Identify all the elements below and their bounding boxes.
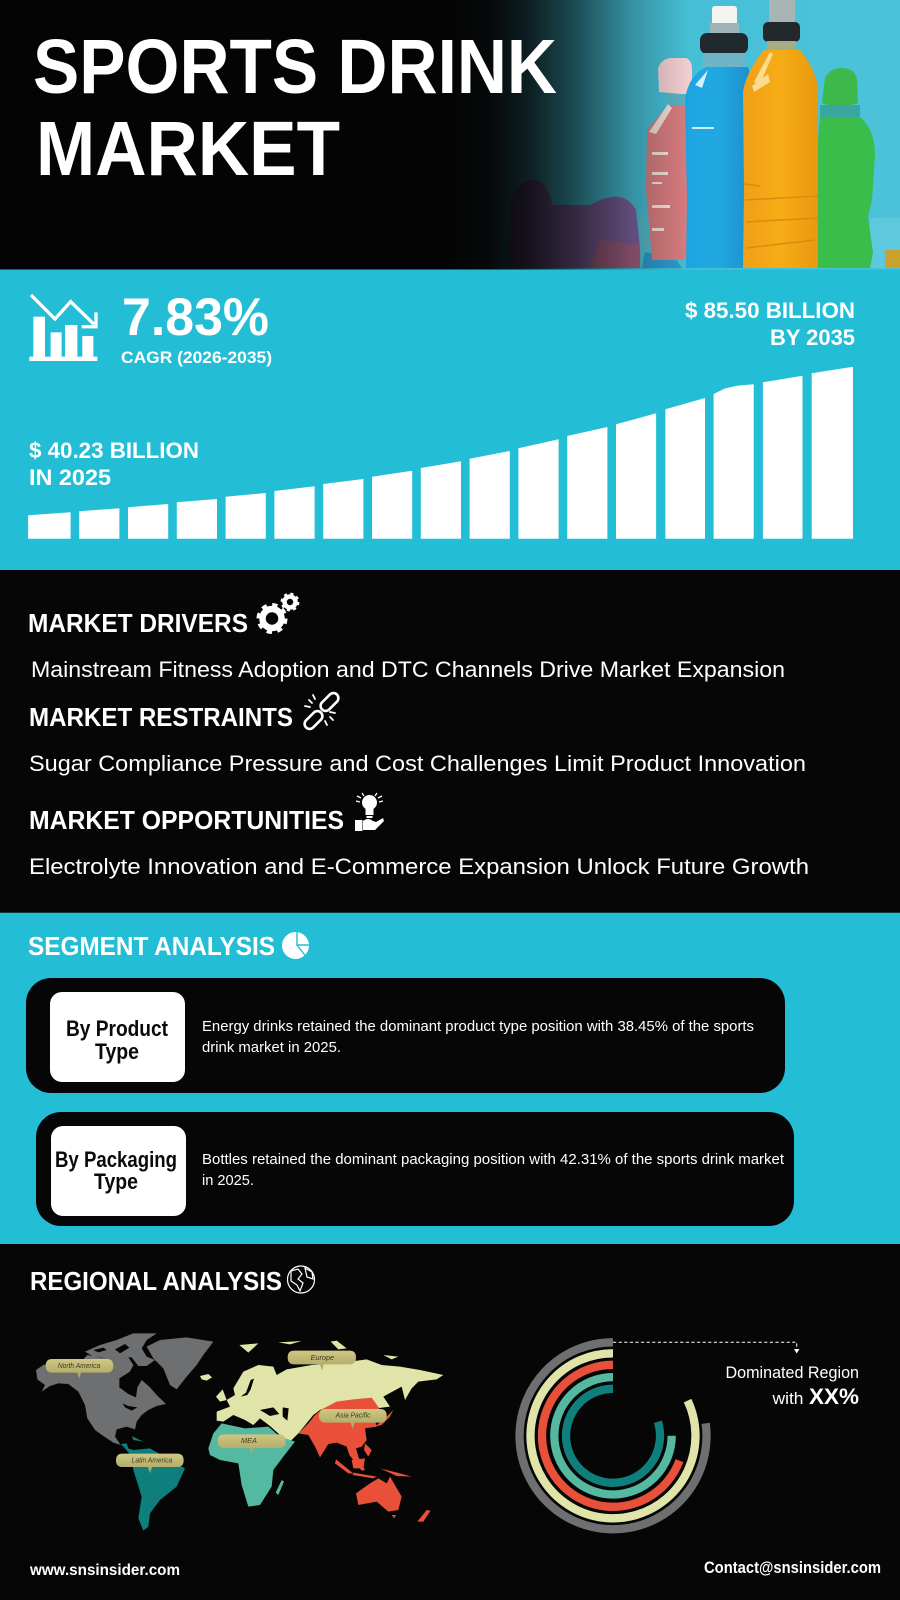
panel: market dynamics	[0, 570, 900, 913]
callout: dominated region: with	[771, 1390, 804, 1408]
region: Asia Pacific	[298, 1398, 431, 1522]
heading: segment analysis: SEGMENT ANALYSIS	[28, 931, 275, 961]
icon: gears	[258, 594, 298, 632]
green bottle	[816, 68, 875, 268]
bar chart: growth	[28, 367, 853, 539]
icon: bar chart with falling line	[29, 295, 97, 361]
callout: dominated region: XX%	[809, 1384, 859, 1409]
callout: North America: North America	[58, 1361, 100, 1370]
icon: broken chain	[303, 691, 340, 731]
heading: market drivers: MARKET DRIVERS	[28, 608, 248, 638]
description: by product type: Energy drinks retained the dominant product type position with 38.45% of the sports	[202, 1019, 754, 1035]
label box: by packaging type: Type	[94, 1169, 138, 1194]
CAGR value: 7.83%	[122, 288, 269, 347]
text: drivers: Mainstream Fitness Adoption and DTC Channels Drive Market Expansion	[31, 657, 785, 682]
callout: Latin America	[116, 1454, 184, 1473]
title	[33, 24, 557, 192]
start value: $ 40.23 BILLION	[29, 438, 199, 463]
icon: globe	[288, 1266, 314, 1293]
callout: MEA	[218, 1434, 286, 1454]
region: Europe	[200, 1341, 443, 1442]
end value: $ 85.50 BILLION	[685, 298, 855, 323]
description: by packaging type	[202, 1152, 784, 1189]
text: restraints: Sugar Compliance Pressure and Cost Challenges Limit Product Innovation	[29, 751, 806, 776]
world map	[36, 1333, 443, 1531]
callout: dominated region: Dominated Region	[726, 1364, 859, 1382]
photo: drink bottles	[508, 0, 900, 268]
description: by product type	[202, 1019, 754, 1056]
icon: pie chart	[282, 930, 312, 959]
end value	[685, 298, 855, 350]
callout: Latin America: Latin America	[132, 1456, 172, 1465]
title: SPORTS DRINK	[33, 24, 557, 110]
radial bar chart	[520, 1342, 707, 1529]
label box: by product type: Type	[95, 1039, 139, 1064]
end value: BY 2035	[770, 325, 855, 350]
region: Middle East and Africa	[208, 1423, 295, 1507]
heading: market opportunities: MARKET OPPORTUNITIES	[29, 805, 344, 835]
callout: Europe	[288, 1351, 356, 1371]
callout: North America	[46, 1359, 113, 1379]
start value	[29, 438, 199, 490]
start value: IN 2025	[29, 465, 111, 490]
text: opportunities: Electrolyte Innovation and E-Commerce Expansion Unlock Future Growth	[29, 854, 809, 879]
dashed arrow	[613, 1342, 800, 1354]
callout: dominated region	[726, 1364, 859, 1409]
panel: market size	[0, 270, 900, 570]
footer: website: www.snsinsider.com	[29, 1562, 180, 1579]
label box: by product type: By Product	[66, 1016, 169, 1041]
description: by packaging type: in 2025.	[202, 1173, 254, 1189]
callout: Asia Pacific	[319, 1409, 387, 1429]
card: by packaging type	[36, 1112, 794, 1226]
callout: MEA: MEA	[241, 1436, 257, 1445]
description: by product type: drink market in 2025.	[202, 1040, 341, 1056]
label box: by packaging type	[51, 1126, 186, 1216]
description: by packaging type: Bottles retained the dominant packaging position with 42.31% of the sports drink market	[202, 1152, 784, 1168]
card: by product type	[26, 978, 785, 1093]
panel: segment analysis	[0, 913, 900, 1244]
title: MARKET	[36, 106, 340, 192]
region: Latin America	[121, 1436, 185, 1531]
callout: Europe: Europe	[311, 1353, 334, 1362]
heading: regional analysis: REGIONAL ANALYSIS	[30, 1266, 282, 1296]
panel: header with photo	[0, 0, 900, 270]
callout: Asia Pacific: Asia Pacific	[335, 1411, 371, 1420]
region: North America	[36, 1333, 213, 1445]
panel: regional analysis	[0, 1244, 900, 1600]
orange bottle	[743, 0, 818, 268]
pink bottle	[646, 58, 692, 260]
heading: market restraints: MARKET RESTRAINTS	[29, 702, 293, 732]
blue bottle	[685, 6, 752, 268]
icon: hand holding light bulb	[355, 793, 384, 831]
CAGR value: CAGR (2026-2035)	[121, 348, 272, 367]
label box: by packaging type: By Packaging	[55, 1147, 177, 1172]
label box: by product type	[50, 992, 185, 1082]
